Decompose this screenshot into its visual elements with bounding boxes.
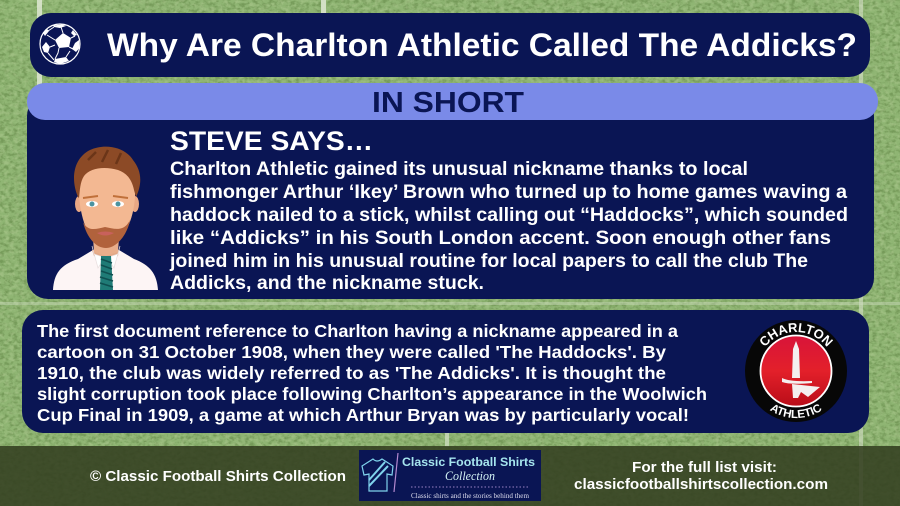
call to action: classicfootballshirtscollection.com [574, 477, 828, 493]
icon: Charlton Athletic crest [745, 320, 847, 422]
sword [782, 341, 820, 398]
body text: Steve says: joined him in his unusual routine for local papers to call the club The [169, 251, 808, 272]
in short band [27, 83, 878, 120]
call to action [574, 460, 828, 493]
logo script: Collection [445, 468, 495, 483]
body text: history [37, 321, 707, 425]
footer strip [0, 446, 900, 506]
panel: Steve says [27, 83, 878, 299]
logo: Classic Football Shirts Collection [359, 450, 541, 501]
body text: history: The first document reference to Charlton having a nickname appeared in a [37, 321, 678, 341]
call to action: For the full list visit: [632, 460, 777, 476]
body text: history: 1910, the club was widely referred to as 'The Addicks'. It is thought the [37, 363, 666, 383]
crest lettering: Athletic: ATHLETIC [770, 404, 822, 418]
title text: Why Are Charlton Athletic Called The Addicks? [107, 27, 857, 63]
panel: first document reference [22, 310, 869, 433]
portrait: Steve [53, 147, 158, 290]
logo tagline: Classic shirts and the stories behind them [411, 491, 529, 500]
title banner [30, 13, 870, 77]
crest lettering: Charlton: CHARLTON [760, 323, 834, 347]
heading: Steve says: STEVE SAYS… [170, 126, 373, 156]
logo name: Classic Football Shirts [402, 457, 535, 469]
copyright: © Classic Football Shirts Collection [90, 469, 346, 485]
body text: Steve says: Addicks, and the nickname stuck. [170, 273, 484, 294]
body text: history: Cup Final in 1909, a game at which Arthur Bryan was by particularly vocal! [37, 405, 689, 425]
heading: in short: IN SHORT [372, 87, 524, 119]
icon: shirt [362, 459, 393, 491]
body text: Steve says: haddock nailed to a stick, whilst calling out “Haddocks”, which sounded [170, 205, 848, 226]
body text: history: slight corruption took place following Charlton’s appearance in the Woolwich [37, 384, 707, 404]
body text: Steve says: fishmonger Arthur ‘Ikey’ Brown who turned up to home games waving a [170, 182, 847, 203]
body text: Steve says: Charlton Athletic gained its unusual nickname thanks to local [170, 159, 748, 180]
body text: Steve says [169, 159, 848, 294]
body text: history: cartoon on 31 October 1908, when they were called 'The Haddocks'. By [37, 342, 666, 362]
icon: football [40, 24, 80, 64]
body text: Steve says: like “Addicks” in his South London accent. Soon enough other fans [170, 228, 831, 249]
